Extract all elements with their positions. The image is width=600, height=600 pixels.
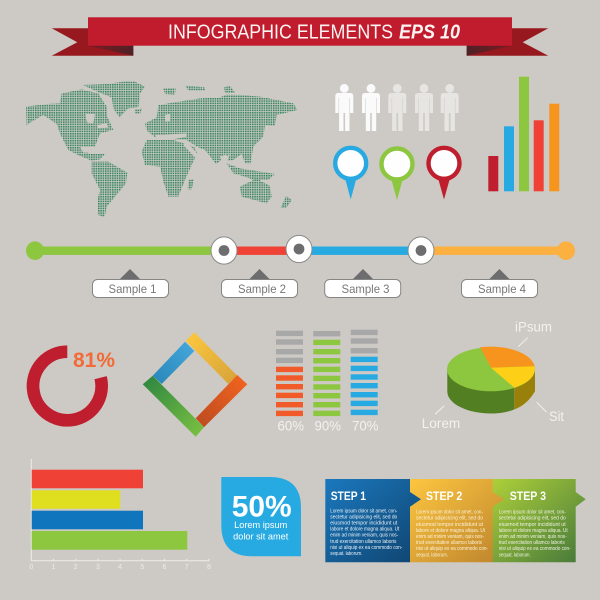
- Greenland: [83, 82, 145, 117]
- person 4: [415, 84, 433, 131]
- Hudson Bay: [85, 113, 95, 123]
- person 5: [441, 84, 459, 131]
- leader Lorem: [435, 406, 444, 414]
- column 3: [519, 77, 529, 191]
- red bar: [32, 470, 143, 488]
- title suffix: EPS 10: [399, 22, 460, 44]
- badge line 2: dolor sit amet: [233, 532, 289, 542]
- step 2 panel: labore et dolore magna aliqua. Ut: [416, 528, 485, 534]
- label: Sample 4: Sample 4: [478, 282, 526, 296]
- step 1 panel: nisi ut aliquip ex ea commodo con-: [330, 545, 403, 551]
- blue side: [153, 342, 194, 384]
- label: Sample 3: [325, 269, 401, 298]
- step 1 panel: [325, 479, 421, 562]
- Bay of Bengal: [220, 154, 227, 165]
- ribbon left fold: [88, 46, 133, 56]
- blue bar: [32, 511, 143, 529]
- leader Sit: [537, 402, 547, 412]
- column 5: [549, 104, 559, 191]
- step 3 panel: sequat. laborum.: [499, 552, 531, 558]
- Madagascar: [188, 179, 194, 189]
- percent label: 81%: [73, 349, 115, 372]
- node 3: [408, 237, 434, 264]
- step 3 panel: enim ad minim veniam, quis nos-: [499, 534, 567, 540]
- green column 90%: [313, 331, 340, 416]
- badge percent: 50%: [232, 491, 292, 524]
- Mediterranean: [155, 133, 187, 140]
- person 3: [388, 84, 406, 131]
- badge shape: [221, 477, 301, 556]
- axis numbers: [29, 564, 211, 571]
- step 1 panel: labore et dolore magna aliqua. Ut: [330, 527, 400, 533]
- ribbon right tail: [467, 28, 548, 56]
- step 3 panel: trud exercitation ullamco laboris: [499, 540, 565, 546]
- step 2 panel: nisi ut aliquip ex ea commodo con-: [416, 546, 488, 552]
- step 2 panel: eiusmod tempor incididunt ut: [416, 522, 484, 528]
- axis numbers: 7: [185, 564, 189, 571]
- x axis: [31, 559, 209, 561]
- yellow side: [186, 332, 237, 384]
- green pin: [382, 148, 412, 200]
- New Zealand: [281, 196, 292, 208]
- donut arc: [33, 352, 102, 420]
- Severny island: [224, 86, 235, 93]
- step 1 panel: STEP 1: [331, 489, 366, 503]
- step 2 panel: STEP 2: [426, 489, 463, 503]
- Eurasia: [145, 95, 297, 164]
- Southeast Asia islands: [227, 163, 275, 180]
- step 3 panel: Lorem ipsum dolor sit amet, con-: [499, 510, 566, 516]
- badge line 1: Lorem ipsum: [234, 520, 288, 530]
- step 2 panel: enim ad minim veniam, quis nos-: [416, 534, 484, 540]
- people icons: [335, 84, 459, 131]
- step 3 panel: [492, 479, 586, 562]
- step 1 panel: eiusmod tempor incididunt ut: [330, 520, 398, 526]
- blue segment: [299, 246, 422, 255]
- leader iPsum: [518, 338, 528, 347]
- South America: [92, 162, 127, 217]
- title ribbon: [52, 17, 548, 56]
- step 3 panel: sectetur adipisicing elit, sed do: [499, 516, 566, 522]
- orange side: [196, 375, 247, 427]
- step 2 panel: trud exercitation ullamco laboris: [416, 540, 482, 546]
- label: Sample 1: Sample 1: [108, 282, 157, 296]
- timeline: [26, 235, 575, 298]
- Baltic Sea: [165, 114, 171, 122]
- axis numbers: 2: [74, 564, 78, 571]
- step 1 panel: sequat. laborum.: [330, 551, 362, 557]
- step 3 panel: eiusmod tempor incididunt ut: [499, 522, 566, 528]
- column chart: [488, 77, 559, 191]
- Africa: [142, 140, 197, 197]
- pie side green: [447, 369, 514, 414]
- pie top yellow: [491, 366, 535, 388]
- axis numbers: 6: [163, 564, 167, 571]
- diamond frame: [143, 332, 247, 437]
- label 70%: 70%: [352, 419, 378, 434]
- green segment: [35, 246, 225, 255]
- start dot: [26, 241, 44, 260]
- green bar: [32, 531, 187, 550]
- step 1 panel: enim ad minim veniam, quis nos-: [330, 533, 398, 539]
- y axis: [30, 459, 32, 561]
- column 2: [504, 126, 514, 191]
- blue column 70%: [351, 330, 378, 415]
- red segment: [224, 246, 300, 255]
- step 1 panel: sectetur adipisicing elit, sed do: [330, 514, 397, 520]
- pie top orange: [480, 347, 535, 368]
- dotted world map: [26, 82, 297, 217]
- person 2: [362, 84, 380, 131]
- North America: [26, 89, 113, 161]
- label: Sample 4: [462, 269, 538, 298]
- axis numbers: 0: [29, 564, 33, 571]
- Red Sea: [183, 142, 200, 159]
- green side: [143, 376, 204, 437]
- blue pin: [335, 148, 366, 200]
- Iceland: [135, 109, 142, 113]
- 3D pie chart: [422, 319, 564, 431]
- step 1 panel: trud exercitation ullamco laboris: [330, 539, 397, 545]
- axis numbers: 5: [140, 564, 144, 571]
- person 1: [335, 84, 353, 131]
- orange segment: [421, 246, 566, 255]
- label 60%: 60%: [278, 419, 304, 434]
- column 4: [534, 120, 544, 191]
- title text: INFOGRAPHIC ELEMENTS: [168, 22, 393, 44]
- three step panels: [325, 479, 586, 562]
- axis numbers: 3: [96, 564, 100, 571]
- 50% badge: [221, 477, 301, 556]
- pie top green: [447, 347, 535, 391]
- donut gauge 81%: [33, 349, 115, 420]
- stacked level bars: [276, 330, 378, 434]
- step 2 panel: sequat. laborum.: [416, 552, 448, 558]
- Australia: [240, 178, 272, 203]
- label Lorem: Lorem: [422, 415, 460, 431]
- axis numbers: 8: [207, 564, 211, 571]
- step 2 panel: Lorem ipsum dolor sit amet, con-: [416, 510, 483, 516]
- step 2 panel: sectetur adipisicing elit, sed do: [416, 516, 483, 522]
- label iPsum: iPsum: [515, 319, 552, 335]
- column 1: [488, 156, 498, 191]
- label Sit: Sit: [549, 408, 564, 424]
- Great Lakes: [97, 123, 108, 128]
- orange column 60%: [276, 331, 303, 416]
- label: Sample 2: Sample 2: [238, 282, 286, 296]
- ribbon band: [88, 17, 512, 46]
- Svalbard: [185, 86, 205, 90]
- node 2: [286, 235, 312, 263]
- label: Sample 1: [92, 269, 168, 298]
- step 2 panel: [409, 479, 504, 562]
- red pin: [428, 148, 460, 200]
- label: Sample 2: [222, 269, 298, 298]
- step 3 panel: labore et dolore magna aliqua. Ut: [499, 528, 568, 534]
- yellow bar: [32, 490, 120, 509]
- axis numbers: 1: [52, 564, 56, 571]
- node 1: [211, 237, 237, 264]
- horizontal bar chart: [29, 459, 211, 571]
- pie side yellow: [514, 369, 535, 410]
- Arctic islands: [163, 88, 176, 95]
- map pins: [335, 148, 460, 200]
- end dot: [557, 241, 575, 260]
- axis numbers: 4: [118, 564, 122, 571]
- ribbon left tail: [52, 28, 133, 56]
- step 3 panel: STEP 3: [510, 489, 546, 503]
- Gulf of Mexico: [80, 147, 95, 153]
- label 90%: 90%: [314, 419, 341, 434]
- ribbon right fold: [467, 46, 512, 56]
- step 1 panel: Lorem ipsum dolor sit amet, con-: [330, 508, 397, 514]
- label: Sample 3: Sample 3: [342, 282, 390, 296]
- step 3 panel: nisi ut aliquip ex ea commodo con-: [499, 546, 571, 552]
